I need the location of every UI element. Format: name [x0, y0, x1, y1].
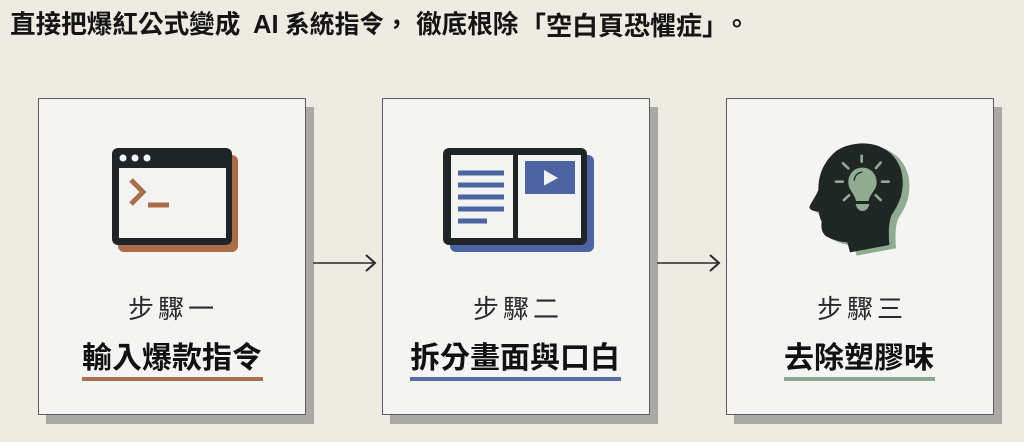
step label 2: 步驟二 — [473, 294, 563, 324]
panel: step 2 — [382, 98, 650, 415]
underline 1 — [82, 377, 263, 381]
title: 「空白頁恐懼症」 — [520, 11, 728, 41]
step label 1: 步驟一 — [128, 294, 218, 324]
step name 2: 拆分畫面與口白 — [410, 342, 620, 375]
panel: step 1 — [38, 98, 306, 415]
step label 3: 步驟三 — [817, 294, 907, 324]
underline 2 — [410, 377, 621, 381]
underline 3 — [784, 377, 935, 381]
title: 系統指令， — [285, 12, 409, 39]
panel: step 3 — [726, 98, 994, 415]
title: 。 — [724, 11, 750, 39]
step name 3: 去除塑膠味 — [784, 342, 934, 375]
title: 直接把爆紅公式變成 — [10, 11, 240, 39]
icon: head with light bulb — [809, 143, 910, 256]
title: 徹底根除 — [416, 11, 518, 39]
title: AI — [253, 11, 279, 39]
step name 1: 輸入爆款指令 — [82, 342, 262, 375]
title — [10, 10, 750, 41]
